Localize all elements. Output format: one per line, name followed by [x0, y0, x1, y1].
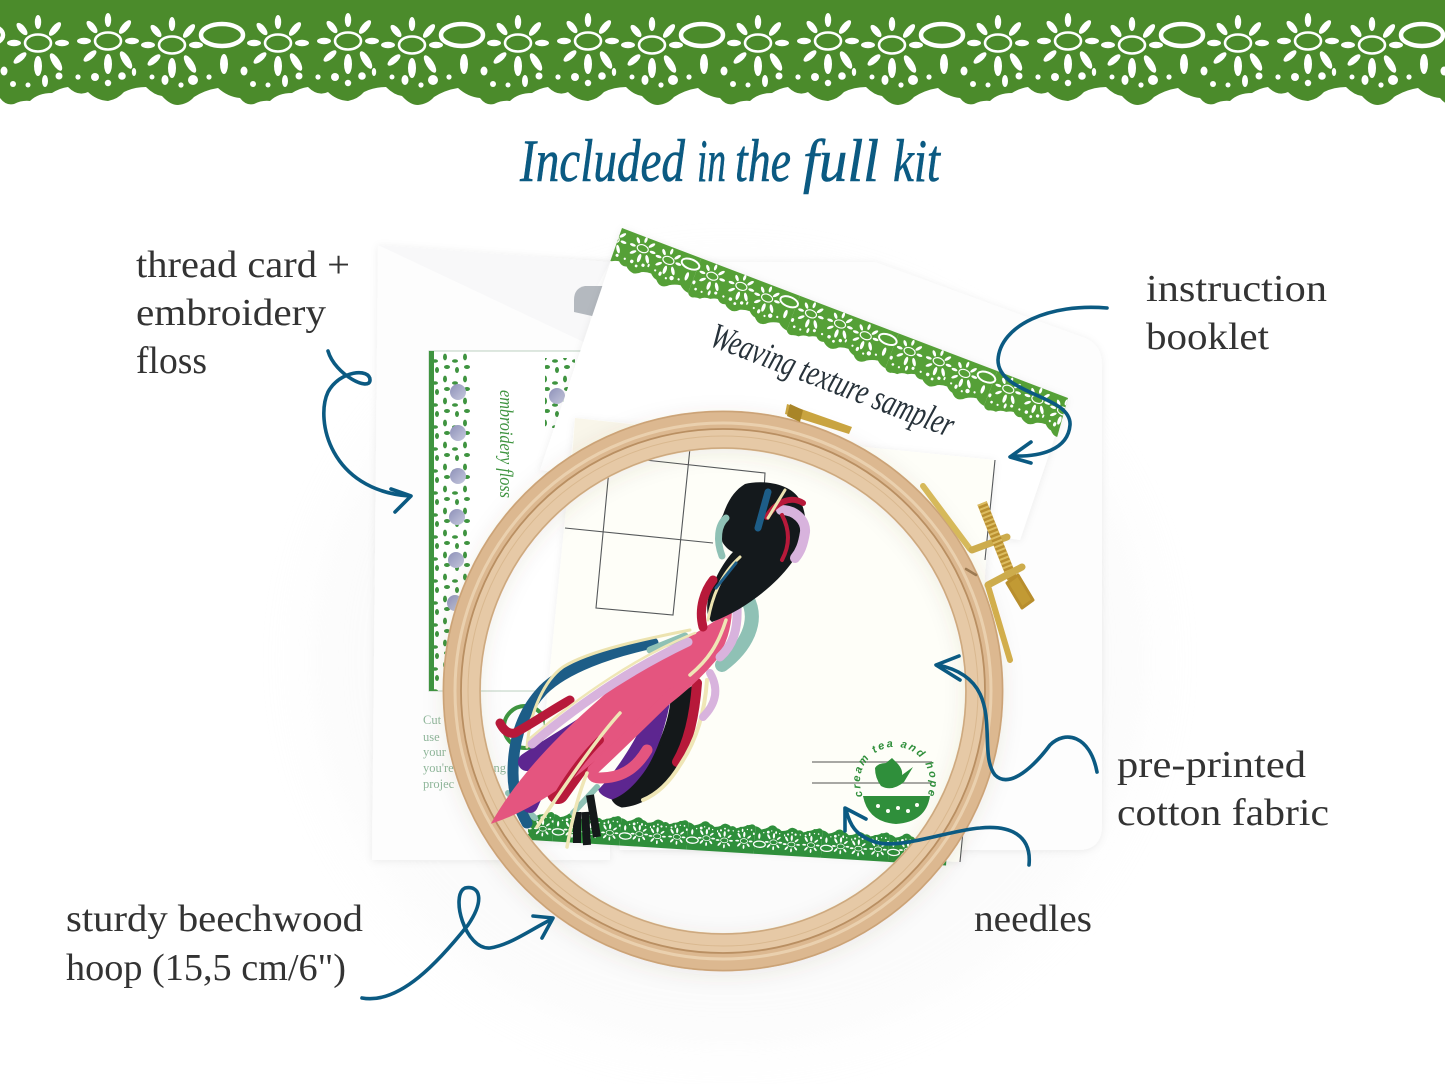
label: thread card and floss: embroidery [136, 292, 326, 334]
blue strand [513, 643, 653, 823]
label: fabric [1117, 744, 1329, 834]
lace strip [429, 351, 589, 691]
cream strands [537, 713, 620, 827]
label: instruction booklet: booklet [1146, 316, 1269, 358]
fabric cream top [572, 418, 640, 460]
arrow: needles [845, 808, 1029, 865]
lilac band [532, 642, 688, 744]
title [519, 128, 941, 194]
fabric grid [565, 448, 995, 862]
thread card instructions: you're [423, 761, 454, 775]
brass screw top [785, 404, 852, 434]
title: full [803, 128, 879, 194]
black braid [707, 482, 805, 622]
label: thread card and floss: floss [136, 340, 207, 382]
teal loose ends [508, 787, 597, 818]
label: hoop [66, 898, 363, 989]
lower black mass [613, 684, 698, 806]
arrow: hoop [362, 888, 553, 999]
cream lower strand [643, 680, 707, 800]
thread card instructions [423, 713, 515, 791]
label: hoop: sturdy beechwood [66, 898, 363, 940]
thread card [372, 245, 610, 860]
black fringe [577, 795, 597, 845]
arrow: instruction booklet [998, 307, 1107, 463]
label: fabric: pre-printed [1117, 744, 1306, 786]
logo stamp [854, 741, 936, 824]
lilac right strand [720, 607, 737, 657]
booklet lace band [610, 228, 1068, 437]
thread card instructions: use [423, 730, 440, 744]
soft shadow around kit [310, 270, 1150, 1050]
instruction booklet [545, 228, 1068, 540]
brass clamp screw [923, 486, 1033, 660]
red short strand [500, 700, 570, 733]
kit packaging card [520, 262, 1102, 850]
logo stamp: cream tea and hope [854, 741, 936, 797]
label: thread card and floss: thread card + [136, 244, 350, 286]
thread card instructions: ing c [490, 761, 515, 775]
embroidery floss [493, 482, 805, 847]
thread card hang hole [574, 286, 610, 320]
wooden hoop [444, 412, 1002, 970]
title: the [735, 128, 791, 194]
cream loop [527, 630, 690, 747]
thread card logo [504, 706, 546, 748]
needles [812, 762, 932, 783]
arrow: fabric [936, 656, 1097, 780]
upper purple [527, 725, 585, 762]
label: fabric: cotton fabric [1117, 792, 1329, 834]
title: in [697, 128, 726, 194]
title: kit [893, 128, 941, 194]
lilac lower strand [703, 673, 715, 717]
title: Included [519, 128, 686, 194]
thread card instructions: Cut [423, 713, 442, 727]
upper colored strands [781, 510, 805, 558]
pink fan [493, 611, 731, 822]
red lower strand [677, 683, 697, 762]
pre-printed cotton fabric [485, 418, 995, 867]
pink loop [592, 693, 673, 778]
hoop cut [966, 569, 976, 575]
red fan [558, 693, 640, 793]
label: thread card and floss [136, 244, 350, 382]
lower purple mass [600, 705, 668, 798]
thread card label: embroidery floss [495, 390, 516, 498]
label: needles: needles [974, 898, 1092, 940]
label: instruction booklet: instruction [1146, 268, 1327, 310]
fabric lace band [528, 812, 946, 866]
booklet title: Weaving texture sampler [705, 315, 961, 445]
arrow: thread card [324, 351, 411, 512]
label: hoop: hoop (15,5 cm/6") [66, 947, 346, 989]
teal right strand [722, 598, 752, 665]
green lace border [0, 0, 1445, 105]
teal band [650, 636, 685, 650]
teapot [875, 758, 913, 788]
label: instruction booklet [1146, 268, 1327, 358]
thread card instructions: your [423, 745, 447, 759]
thread card instructions: projec [423, 777, 455, 791]
red inner strand [558, 740, 600, 795]
